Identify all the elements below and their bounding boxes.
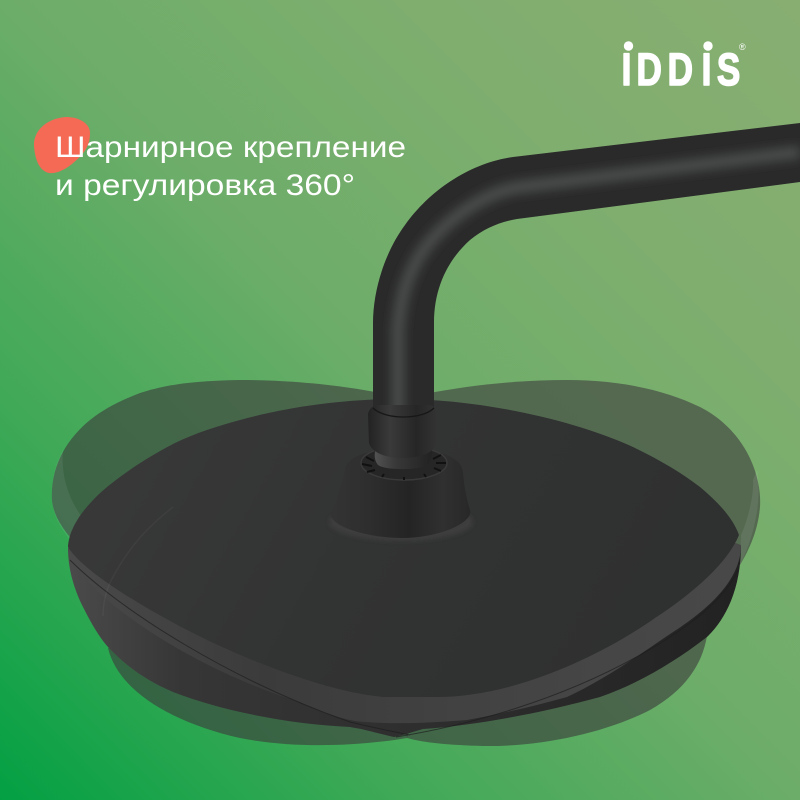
faint ghost edge on the face: [103, 507, 173, 616]
ghost disc underside: right: [400, 620, 707, 746]
heading text: и регулировка 360°: [55, 169, 355, 202]
swivel ball neck: [375, 448, 432, 469]
logo: IDDIS: [622, 41, 746, 95]
heading text: Шарнирное крепление: [55, 131, 406, 164]
ghost disc rim: right: [740, 470, 759, 565]
ring segments: [362, 455, 446, 480]
red accent blob: [34, 117, 90, 173]
main disc top face: [68, 399, 739, 697]
rim contour lines: [70, 560, 738, 737]
shower head illustration: [52, 110, 800, 746]
logo: i dots: [624, 41, 713, 51]
collar top seam: [373, 408, 434, 417]
logo: registered mark: ®: [739, 42, 746, 52]
logo wordmark: IDDIS: [622, 44, 740, 95]
pipe collar: [368, 405, 437, 458]
main disc side wall: [68, 545, 741, 737]
ghost disc underside: left: [108, 620, 420, 745]
base flange cone: [331, 449, 470, 538]
pipe silhouette: [373, 123, 800, 407]
base flange soft shadow: [329, 503, 473, 541]
ghost disc: tilted left upper: [52, 380, 420, 710]
shower arm pipe: [373, 123, 800, 407]
ghost disc rim: left: [52, 450, 95, 542]
main disc light rim band: [68, 530, 741, 723]
ghost disc: tilted right upper: [400, 380, 760, 640]
bearing ring: [361, 446, 447, 480]
pipe highlight: [398, 152, 800, 420]
